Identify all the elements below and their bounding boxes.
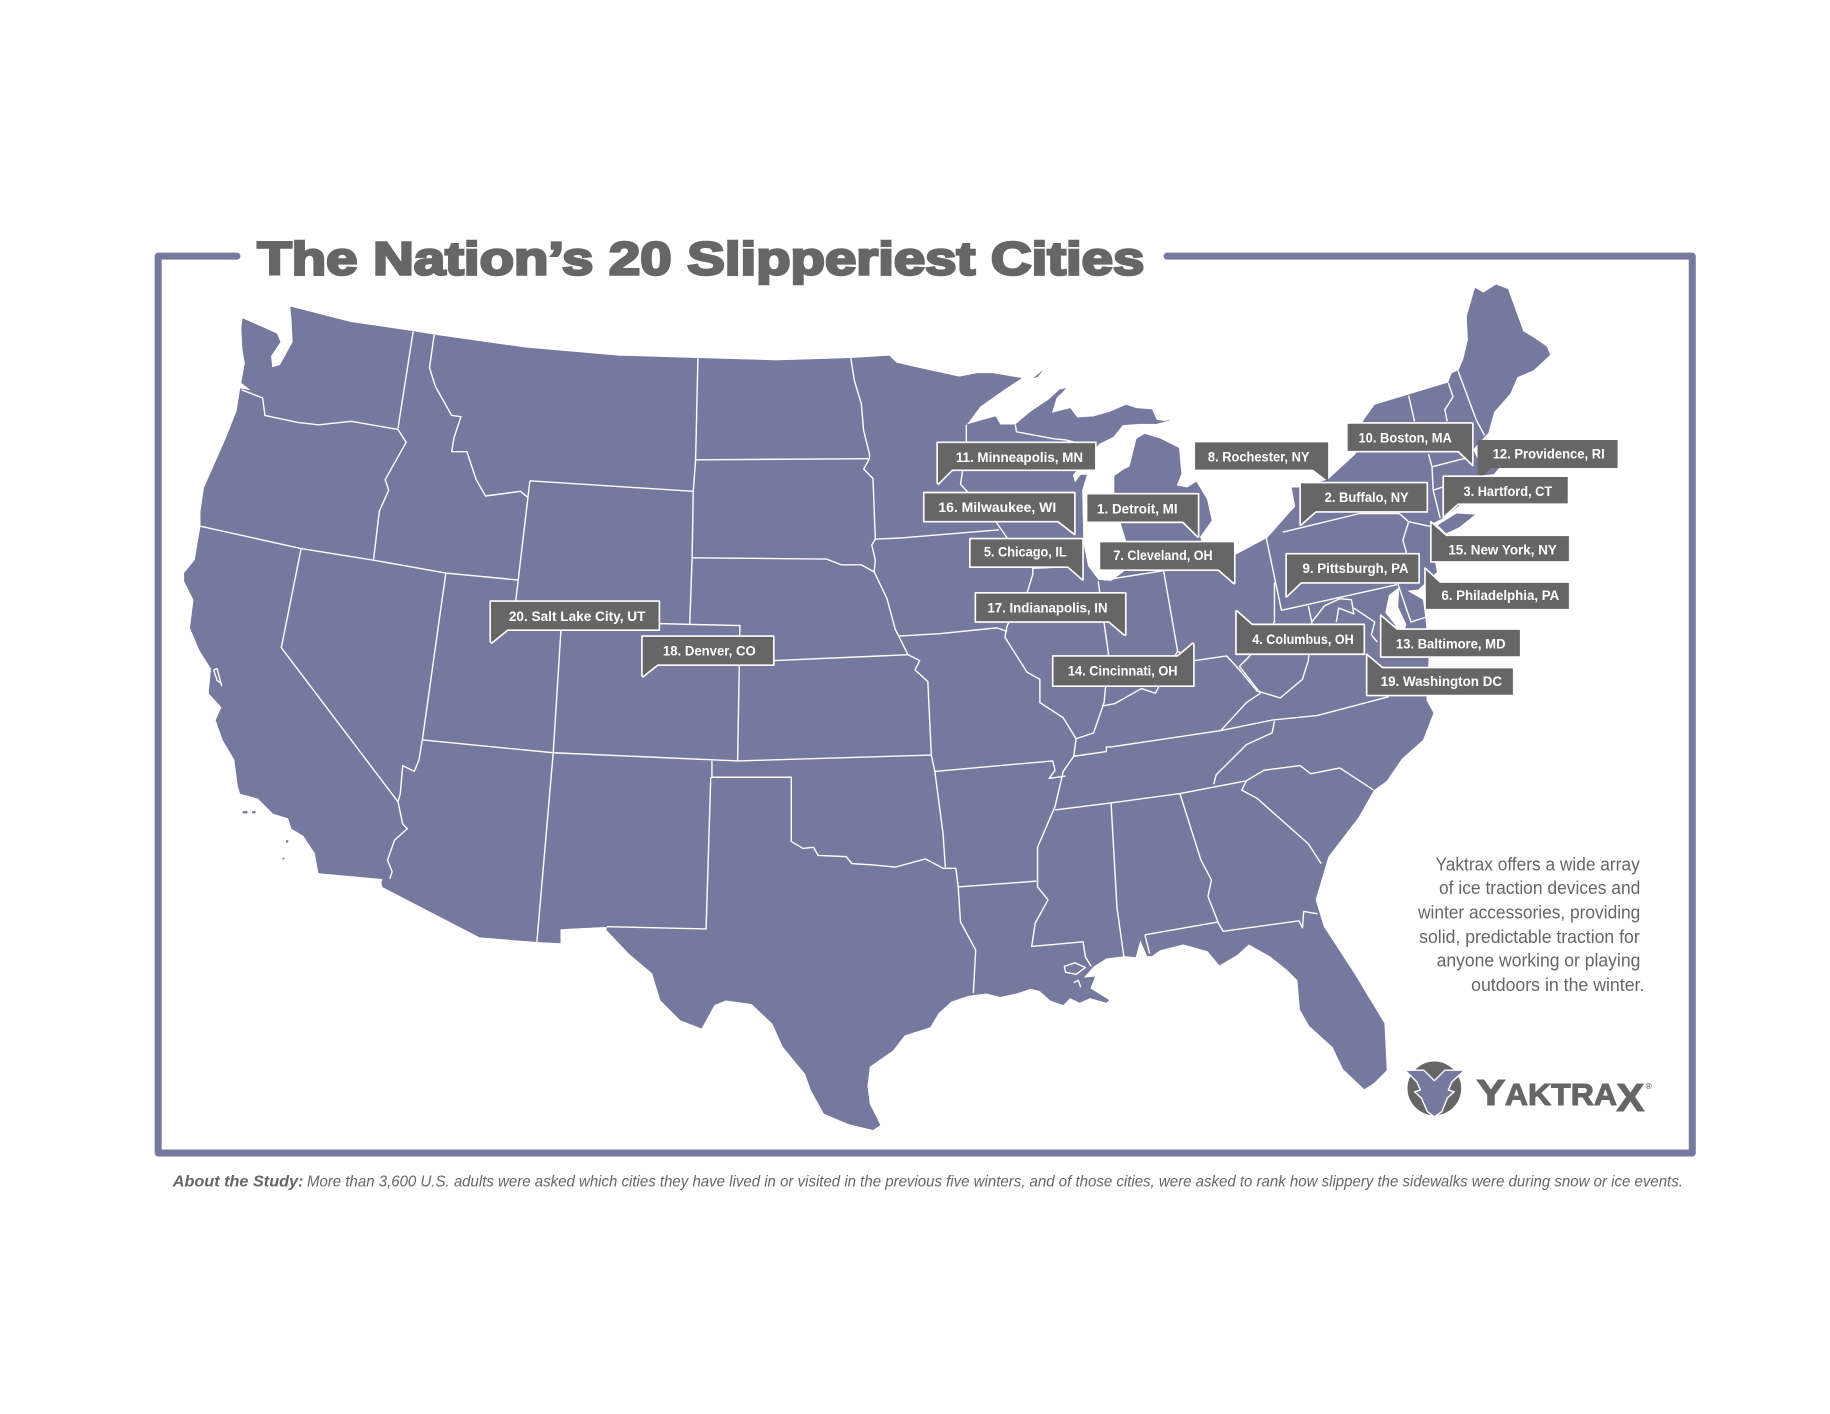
Yaktrax description: outdoors in the winter.	[1471, 975, 1644, 995]
callout: 13 Baltimore: 13. Baltimore, MD	[1396, 636, 1506, 651]
Yaktrax description: winter accessories, providing	[1417, 902, 1640, 922]
frame border	[158, 256, 1692, 1153]
callout: 12 Providence	[1478, 440, 1618, 480]
callout: 8 Rochester: 8. Rochester, NY	[1208, 450, 1310, 465]
callout: 9 Pittsburgh: 9. Pittsburgh, PA	[1302, 561, 1409, 576]
callout: 18 Denver: 18. Denver, CO	[663, 643, 756, 658]
callout: 5 Chicago	[970, 539, 1083, 580]
icon: yak head	[1405, 1062, 1465, 1117]
callout: 1 Detroit: 1. Detroit, MI	[1097, 502, 1178, 517]
callout: 4 Columbus: 4. Columbus, OH	[1252, 632, 1354, 647]
Chesapeake Bay	[1385, 587, 1406, 644]
callout: 3 Hartford: 3. Hartford, CT	[1464, 484, 1553, 499]
Yaktrax description: of ice traction devices and	[1439, 878, 1640, 898]
callout: 13 Baltimore	[1381, 615, 1521, 657]
callout: 17 Indianapolis: 17. Indianapolis, IN	[987, 601, 1108, 616]
callout: 15 New York: 15. New York, NY	[1448, 542, 1557, 557]
callout: 16 Milwaukee: 16. Milwaukee, WI	[938, 500, 1056, 515]
callout: 19 Washington DC	[1367, 654, 1514, 696]
callout: 12 Providence: 12. Providence, RI	[1493, 447, 1605, 462]
callout: 7 Cleveland	[1099, 542, 1235, 584]
callout: 7 Cleveland: 7. Cleveland, OH	[1113, 548, 1213, 563]
Isle Royale	[1033, 370, 1043, 378]
callout: 19 Washington DC: 19. Washington DC	[1381, 674, 1502, 689]
callout: 2 Buffalo	[1300, 483, 1427, 525]
about the study footnote: About the Study:	[172, 1173, 303, 1190]
wordmark: Y	[1476, 1072, 1506, 1113]
Yaktrax description: solid, predictable traction for	[1419, 927, 1640, 947]
callout: 10 Boston	[1347, 423, 1473, 466]
callout: 18 Denver	[642, 636, 774, 677]
title: The Nation’s 20 Slipperiest Cities	[257, 232, 1144, 284]
callout: 10 Boston: 10. Boston, MA	[1358, 430, 1452, 445]
callout: 8 Rochester	[1195, 442, 1328, 481]
callout: 17 Indianapolis	[975, 593, 1126, 635]
callout: 16 Milwaukee	[924, 492, 1075, 535]
callout: 1 Detroit	[1087, 494, 1199, 537]
callout: 4 Columbus	[1236, 611, 1364, 654]
callout: 20 Salt Lake City	[490, 601, 659, 643]
Long Island	[1438, 514, 1475, 533]
Yaktrax description: anyone working or playing	[1437, 950, 1640, 970]
map of the United States	[184, 285, 1550, 1130]
callout: 3 Hartford	[1443, 476, 1569, 518]
about the study footnote: More than 3,600 U.S. adults were asked which cities they have lived in or visited in the previous five winters, and of those cities, were asked to rank how slippery the sidewalks were during snow or ice events.	[307, 1173, 1683, 1190]
callout: 5 Chicago: 5. Chicago, IL	[984, 545, 1067, 560]
callout: 6 Philadelphia	[1425, 568, 1570, 610]
state boundaries	[201, 331, 1485, 993]
wordmark: AKTRA	[1505, 1079, 1617, 1112]
wordmark: ®	[1646, 1082, 1652, 1091]
Yaktrax description	[1417, 855, 1644, 995]
Yaktrax description: Yaktrax offers a wide array	[1436, 855, 1640, 875]
callout: 20 Salt Lake City: 20. Salt Lake City, UT	[509, 609, 646, 624]
map landmass	[184, 285, 1550, 1130]
Yaktrax logo	[1405, 1062, 1652, 1120]
wordmark: X	[1616, 1077, 1645, 1120]
California islands	[243, 811, 288, 860]
callout: 14 Cincinnati	[1053, 643, 1194, 686]
callout: 6 Philadelphia: 6. Philadelphia, PA	[1441, 588, 1560, 603]
callout: 2 Buffalo: 2. Buffalo, NY	[1325, 490, 1409, 505]
wordmark	[1476, 1072, 1652, 1120]
callout: 11 Minneapolis	[937, 442, 1096, 484]
callout: 9 Pittsburgh	[1286, 554, 1419, 597]
callout: 15 New York	[1431, 522, 1570, 562]
callout: 11 Minneapolis: 11. Minneapolis, MN	[956, 450, 1083, 465]
callout: 14 Cincinnati: 14. Cincinnati, OH	[1068, 664, 1178, 679]
